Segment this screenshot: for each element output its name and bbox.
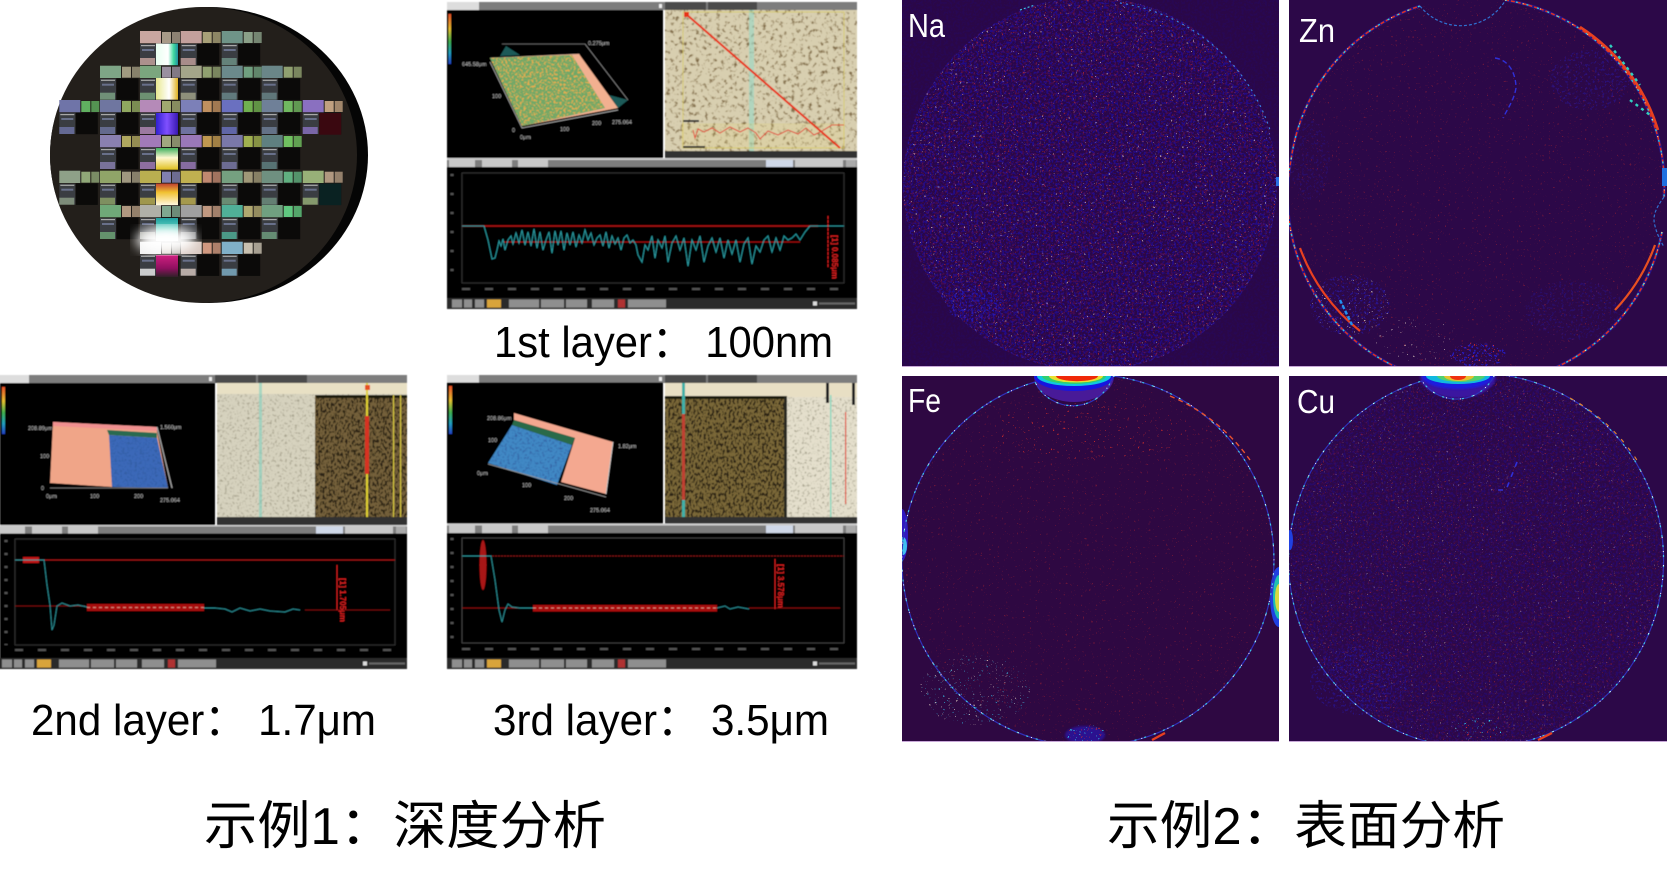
panel: 3rd layer measurement: [447, 375, 857, 669]
3D view pane: 0μm: [520, 135, 531, 141]
profile graph: [447, 533, 857, 658]
3D view pane: 100: [522, 483, 531, 489]
3D view pane: 1.82μm: [618, 444, 637, 450]
panel edges: [902, 366, 1667, 742]
3D view pane: 0: [512, 128, 515, 134]
3D view pane: 1.560μm: [160, 425, 182, 431]
title: example 2 surface analysis: 示例2：表面分析: [1107, 798, 1505, 856]
Zn speckle: [1290, 0, 1664, 371]
caption: 1st layer: 1st layer： 100nm: [494, 318, 833, 367]
Cu speckle: [1290, 373, 1664, 747]
label: Fe: Fe: [908, 382, 941, 419]
3D view pane: 208.89μm: [28, 426, 53, 432]
3D view pane: 100: [492, 94, 501, 100]
3D view pane: 200: [134, 494, 143, 500]
Cu notch heat blob: [1418, 376, 1498, 399]
3D view pane: 0μm: [477, 471, 488, 477]
wafer photo: [50, 7, 368, 303]
wafer centre column bright dies: [156, 44, 341, 277]
profile graph: [0, 534, 407, 658]
microscope pane: [665, 10, 857, 158]
3D view pane: 0.275μm: [588, 41, 610, 47]
label: Na: Na: [908, 7, 946, 44]
Zn rim: [1288, 0, 1667, 385]
caption: 3rd layer: 3rd layer： 3.5μm: [493, 696, 829, 745]
panel: Cu map: [1287, 354, 1667, 748]
Cu rim: [1287, 374, 1664, 748]
3D view pane: 208.86μm: [487, 416, 512, 422]
panel: Na map: [902, 0, 1279, 371]
Zn curved feature: [1495, 58, 1516, 118]
3D view pane: 100: [90, 494, 99, 500]
panel: 1st layer measurement: [447, 2, 857, 309]
3D view pane: 100: [560, 127, 569, 133]
label: Cu: Cu: [1297, 383, 1335, 420]
Na speckle: [902, 0, 1279, 371]
profile graph: [1] 0.085μm: [830, 235, 839, 279]
profile graph: [1] 1.705μm: [338, 578, 347, 622]
3D view pane: [447, 382, 663, 524]
3D view pane: 100: [488, 438, 497, 444]
3D view pane: 275.064: [612, 120, 632, 126]
profile graph: [1] 3.578μm: [776, 564, 785, 608]
wafer glare: [136, 227, 196, 253]
3D view pane: 0: [41, 486, 44, 492]
Fe notch heat blob: [1034, 376, 1114, 402]
wafer reticle grid: [59, 31, 343, 276]
microscope pane: [217, 383, 407, 525]
3D view pane: 275.064: [160, 498, 180, 504]
microscope pane: [665, 383, 857, 524]
Cu streak: [1498, 462, 1517, 490]
wafer body: [50, 7, 357, 303]
3D view pane: 645.58μm: [462, 62, 487, 68]
panel: Zn map: [1288, 0, 1667, 385]
panel: 2nd layer measurement: [0, 375, 407, 669]
3D view pane: 0μm: [46, 494, 57, 500]
3D view pane: [0, 383, 215, 525]
wafer shadow crescent: [50, 7, 368, 303]
panel: Fe map: [902, 376, 1279, 741]
title: example 1 depth analysis: 示例1：深度分析: [204, 798, 606, 856]
Na rim: [904, 0, 1279, 370]
3D view pane: 200: [564, 496, 573, 502]
3D view pane: 200: [592, 121, 601, 127]
profile graph: [447, 167, 857, 298]
Fe speckle: [903, 374, 1275, 746]
label: Zn: Zn: [1299, 12, 1335, 49]
Fe edge heat blobs: [896, 509, 1288, 744]
caption: 2nd layer: 2nd layer： 1.7μm: [31, 696, 376, 745]
3D view pane: 275.064: [590, 508, 610, 514]
Fe rim: [902, 376, 1274, 746]
3D view pane: [447, 10, 663, 158]
3D view pane: 100: [40, 454, 49, 460]
